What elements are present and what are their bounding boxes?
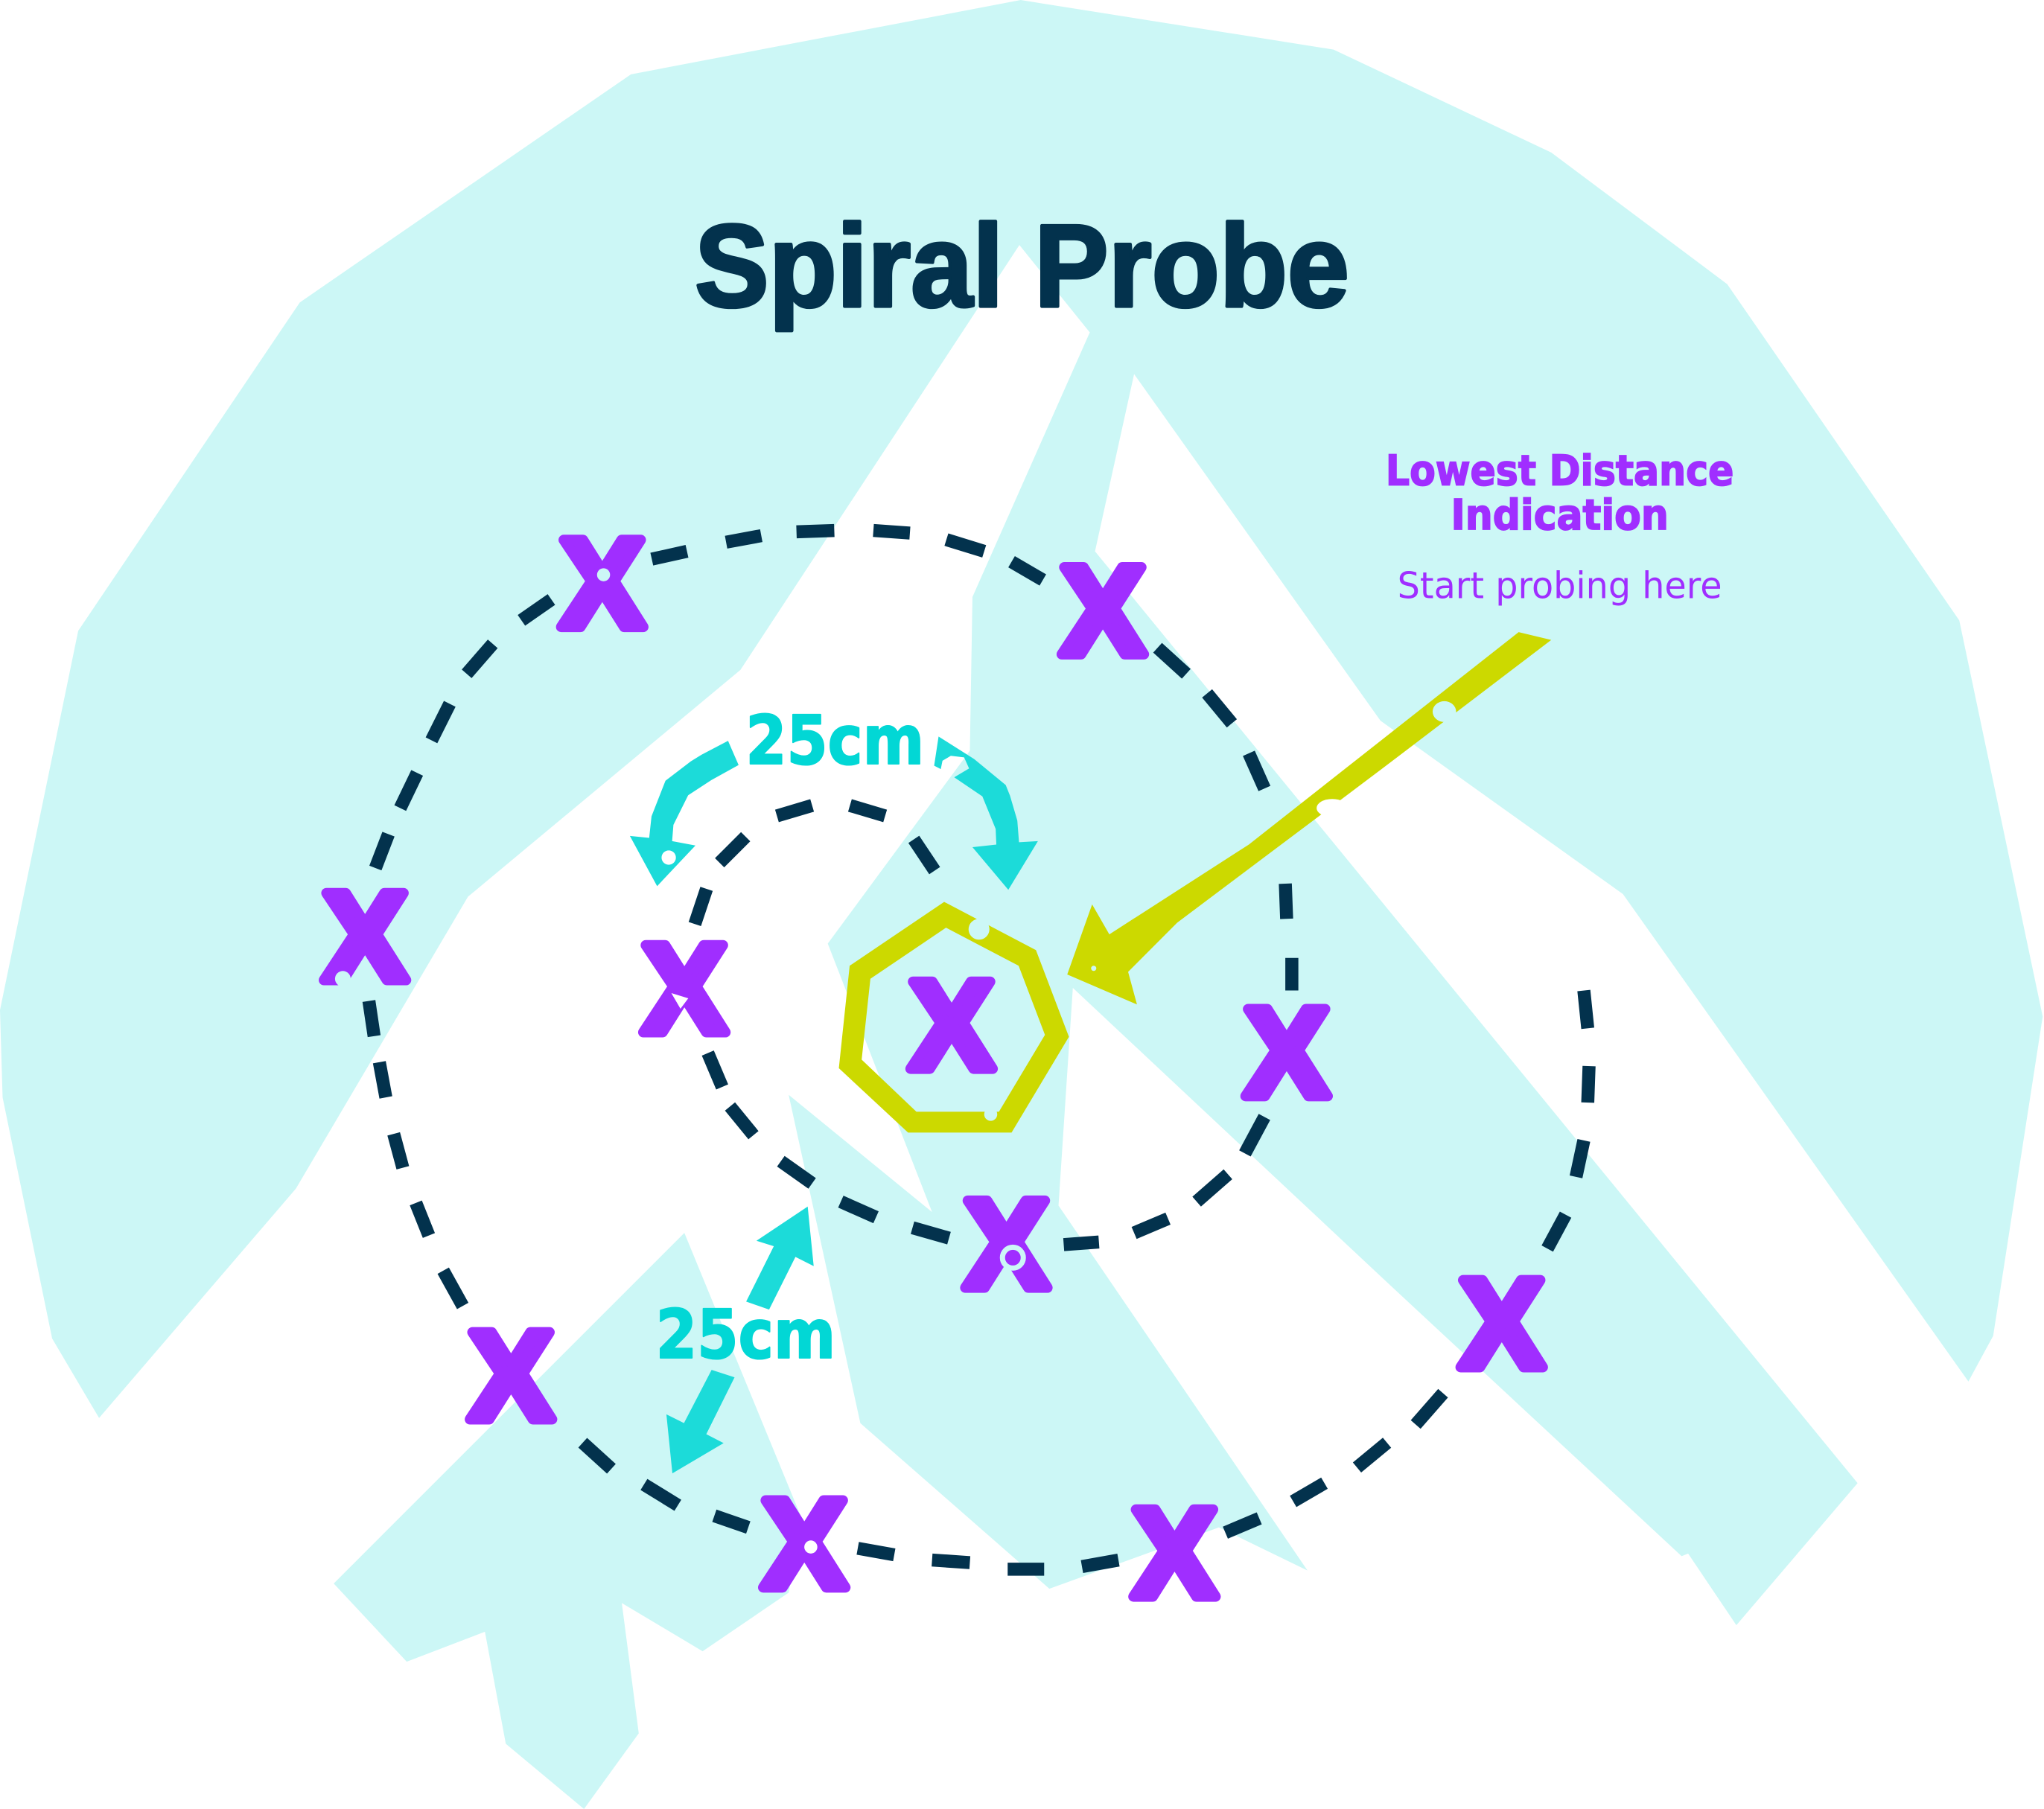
probe point markers: X bbox=[1244, 981, 1329, 1123]
probe point markers: X bbox=[323, 866, 407, 1007]
highlight: heptagon around lowest reading bbox=[839, 902, 1069, 1132]
probe point markers: X bbox=[762, 1473, 847, 1614]
probe point markers: X bbox=[909, 954, 994, 1096]
title: Spiral Probe bbox=[695, 200, 1349, 331]
probe point markers: X bbox=[642, 918, 727, 1059]
arrow: start probing here bbox=[1067, 632, 1551, 1004]
straight arrows: 25cm spacing between rings bbox=[656, 1207, 835, 1473]
probe point markers: X bbox=[560, 512, 644, 654]
probe point markers: X bbox=[1133, 1482, 1217, 1624]
probe point markers: X bbox=[964, 1173, 1048, 1315]
spiral dashed probing path bbox=[369, 531, 1589, 1569]
probe point markers: X bbox=[469, 1305, 553, 1446]
straight arrows: 25cm spacing between rings: 25cm bbox=[656, 1296, 835, 1374]
label: lowest distance indication: Lowest Distance bbox=[1386, 447, 1733, 495]
distressed flecks on arrows and markers bbox=[335, 568, 1456, 1554]
curved arrows: 25cm spacing along path bbox=[630, 702, 1038, 890]
label: lowest distance indication bbox=[1386, 447, 1733, 607]
probe point markers: X bbox=[1459, 1252, 1544, 1394]
probe point markers bbox=[323, 512, 1544, 1624]
label: lowest distance indication: Indication bbox=[1451, 491, 1669, 540]
probe point markers: X bbox=[1060, 540, 1145, 681]
label: lowest distance indication: Start probing here bbox=[1398, 565, 1722, 607]
curved arrows: 25cm spacing along path: 25cm bbox=[745, 702, 924, 780]
